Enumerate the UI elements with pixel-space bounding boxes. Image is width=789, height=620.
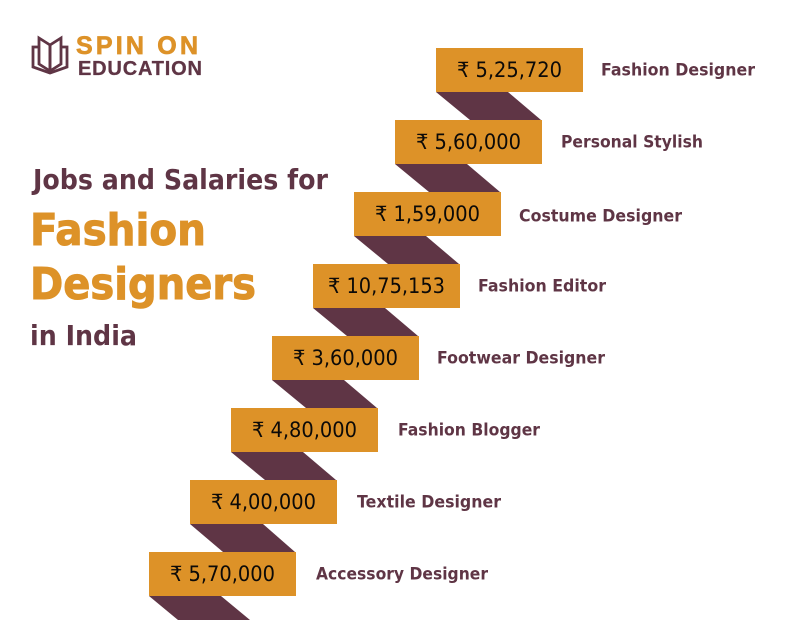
- step: personal stylish: Personal Stylish: [561, 132, 703, 152]
- step: fashion blogger: ₹ 4,80,000: [252, 418, 357, 442]
- step: accessory designer: ₹ 5,70,000: [170, 562, 275, 586]
- logo text: education: EDUCATION: [78, 58, 202, 80]
- step: footwear designer: Footwear Designer: [437, 348, 606, 368]
- step: fashion designer: Fashion Designer: [601, 60, 756, 80]
- step: personal stylish: [395, 120, 703, 164]
- heading: [30, 163, 328, 352]
- step: accessory designer: [149, 552, 489, 596]
- step: fashion blogger: [231, 408, 541, 452]
- step: textile designer: ₹ 4,00,000: [211, 490, 316, 514]
- step: fashion designer: ₹ 5,25,720: [457, 58, 562, 82]
- logo text: spin on: SPIN ON: [76, 32, 198, 60]
- heading line: designers: Designers: [30, 259, 256, 310]
- step: costume designer: Costume Designer: [519, 206, 683, 226]
- step: textile designer: Textile Designer: [357, 492, 502, 512]
- step: footwear designer: [272, 336, 606, 380]
- step: fashion editor: ₹ 10,75,153: [328, 274, 445, 298]
- step: costume designer: ₹ 1,59,000: [375, 202, 480, 226]
- heading line: jobs and salaries: Jobs and Salaries for: [31, 163, 328, 196]
- step: costume designer: [354, 192, 683, 236]
- heading line: in india: in India: [30, 319, 137, 352]
- logo: [33, 32, 202, 80]
- step: personal stylish: ₹ 5,60,000: [416, 130, 521, 154]
- step: footwear designer: ₹ 3,60,000: [293, 346, 398, 370]
- step: accessory designer: Accessory Designer: [316, 564, 489, 584]
- staircase ribbons: [149, 92, 541, 620]
- step: textile designer: [190, 480, 502, 524]
- step: fashion editor: [313, 264, 607, 308]
- step: fashion blogger: Fashion Blogger: [398, 420, 541, 440]
- step: fashion editor: Fashion Editor: [478, 276, 607, 296]
- icon: open book: [33, 38, 67, 73]
- step: fashion designer: [436, 48, 756, 92]
- heading line: fashion: Fashion: [30, 205, 206, 256]
